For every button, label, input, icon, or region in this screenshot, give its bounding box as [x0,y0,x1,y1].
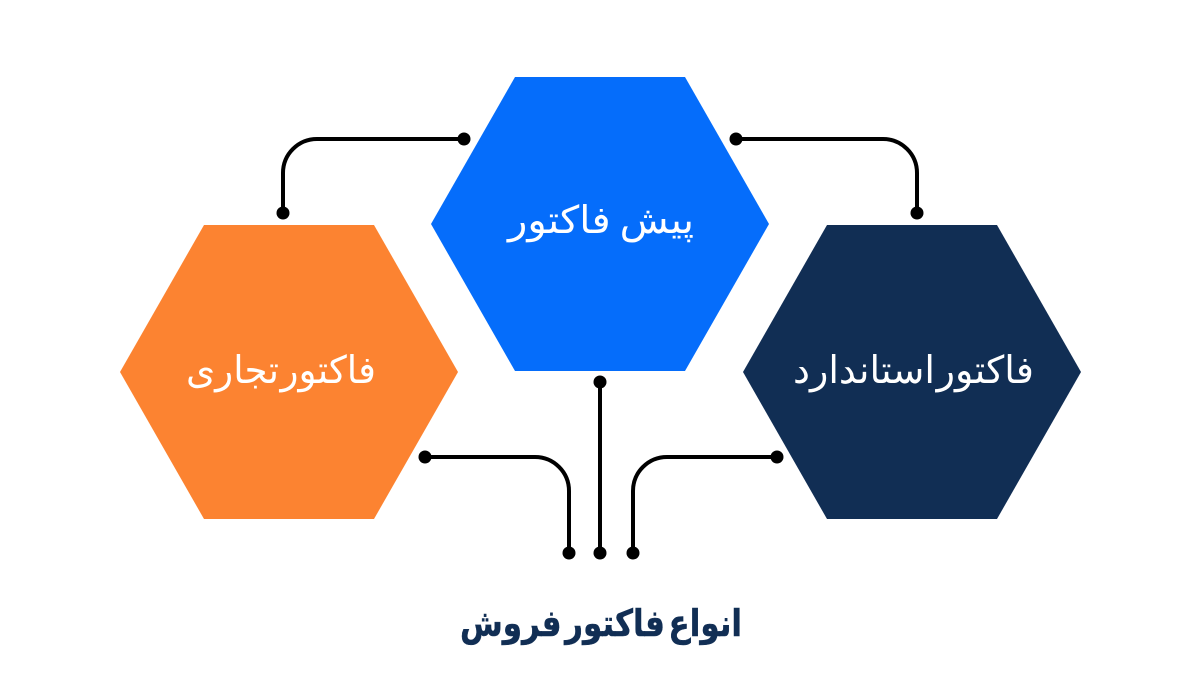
hexagon: commercial invoice [120,225,458,519]
hexagon: pre-invoice [431,77,769,371]
title: انواع فاکتور فروش [460,603,742,645]
connector: pre-invoice to standard [730,132,924,220]
hexagon: standard invoice: فاکتور استاندارد [793,350,1034,393]
connector: pre-invoice to title [594,376,606,560]
hexagon: commercial invoice: فاکتور تجاری [186,350,376,393]
hexagon: pre-invoice: پیش فاکتور [506,200,694,243]
connector: commercial to title [418,450,576,560]
connector: standard to title [626,450,784,560]
connector: pre-invoice to commercial [276,132,470,220]
hexagon: standard invoice [743,225,1081,519]
